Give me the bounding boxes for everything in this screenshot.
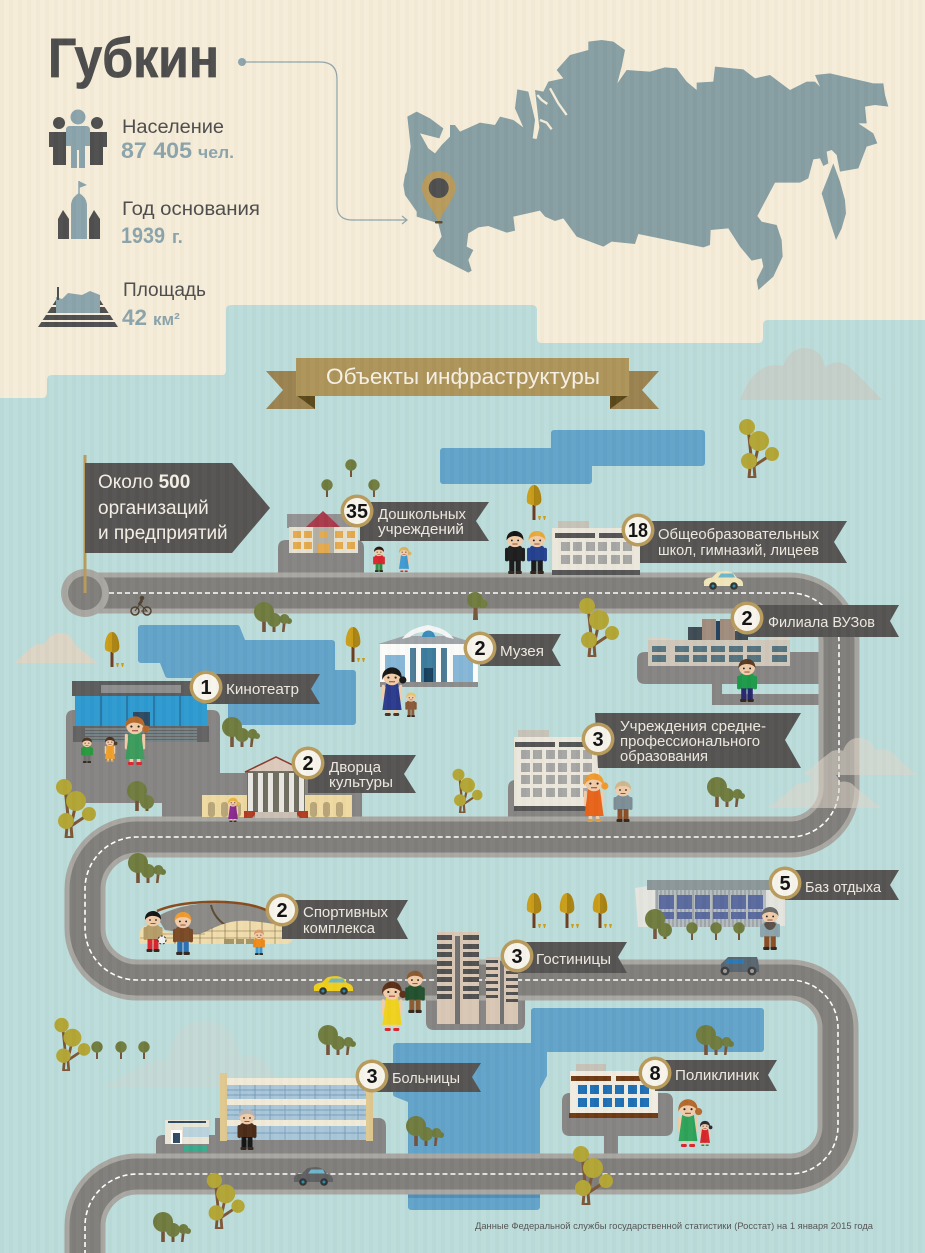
text: area: 42 [122,305,147,330]
flag text: и предприятий [98,523,228,544]
text: founding year: Год основания [122,199,260,220]
hospital building [165,1073,373,1152]
label: colleges: 3 [592,729,604,751]
label: hotels: 3 [511,946,523,968]
college building [514,730,599,811]
label: museums: 2 [474,638,486,660]
map of Russia [403,40,888,290]
cream car [704,571,743,590]
flag text: Около 500 [98,472,190,493]
school building [552,521,640,575]
people [81,531,780,1150]
label: schools: Общеобразовательных [658,526,819,543]
trees: small round [91,459,745,1059]
label: cinema: Кинотеатр [226,681,299,698]
cloud: upper right [740,348,882,400]
ribbon tails [266,371,315,409]
kindergarten building [287,511,358,553]
flag text: организаций [98,498,209,519]
bicycle [131,596,151,615]
pad: hospital [156,1118,386,1158]
label: recreation bases: Баз отдыха [805,879,882,896]
tree: green on road edge [467,592,488,620]
lake: top [443,433,702,481]
pad: hotel [426,975,525,1030]
trees: autumn [105,485,612,928]
label: schools [622,514,847,563]
label: preschools: Дошкольных [378,506,466,523]
text: founding year: 1939 [121,223,165,248]
cloud: over road at right [768,738,917,808]
label: sports complexes [266,894,408,939]
text: area [122,280,206,330]
lake: bottom [396,1011,761,1207]
label: hospitals [356,1060,481,1092]
road start circle [61,569,109,617]
central portico [245,757,307,772]
cinema building [72,681,209,742]
ground pads under buildings [66,540,822,1160]
label: preschools [340,494,489,541]
lake shadow under road [408,1193,540,1198]
title: Губкин [48,26,219,89]
label: palaces of culture: Дворца [329,759,382,776]
label: cinema: 1 [200,677,212,699]
text: founding year [121,199,260,248]
hotel towers [437,932,518,1024]
wings [202,795,248,817]
icon: population [49,110,107,168]
hospital main block [226,1078,369,1140]
sports complex [139,902,293,944]
label: preschools: учреждений [378,521,464,538]
university building [648,619,790,666]
trees: green clusters [127,602,745,1242]
text: population: Население [122,117,224,138]
pad: cinema and palace [66,710,362,820]
label: sports complexes: 2 [276,900,288,922]
van [720,957,759,976]
text: population: чел. [198,143,234,162]
section ribbon [266,358,659,409]
text: population [121,117,234,163]
cloud: faint behind hospital [104,1021,284,1087]
icon: founding year [58,181,100,239]
label: schools: 18 [628,520,648,542]
label: schools: школ, гимназий, лицеев [658,542,819,559]
label: recreation bases [768,866,899,900]
label: palaces of culture [292,746,416,793]
label: museums: Музея [500,643,544,660]
label: recreation bases: 5 [779,873,791,895]
yellow taxi [314,976,353,995]
museum building [378,625,478,687]
lakes [141,433,761,1207]
sky-blue ground area [0,305,925,1253]
icon: area [38,287,118,327]
recreation base building [635,880,785,927]
label: hospitals: Больницы [392,1070,460,1087]
label: hospitals: 3 [366,1066,378,1088]
label: palaces of culture: 2 [302,753,314,775]
dark car [294,1167,333,1186]
flag pole and flag [84,455,270,593]
label: museums [464,632,561,666]
label: colleges: Учреждения средне- [620,718,766,735]
label: preschools: 35 [346,501,368,523]
lake: middle [141,628,353,722]
label: cinema [190,670,320,704]
road [85,593,839,1253]
label: universities: 2 [741,608,753,630]
hospital annex [165,1120,209,1144]
label: sports complexes: Спортивных [303,904,388,921]
text: founding year: г. [172,227,183,247]
label: hotels [500,940,627,973]
map pin [422,171,455,224]
text: area: Площадь [123,280,206,301]
text: area: км² [153,310,180,329]
connector line from title to map [238,58,407,224]
label: hotels: Гостиницы [536,951,611,968]
label: colleges [582,713,801,768]
pad: kindergarten [278,540,364,575]
trees: branched [54,419,779,1229]
palace of culture [202,757,352,818]
ribbon heading: Объекты инфраструктуры [326,364,600,389]
pad: college [508,780,600,820]
label: colleges: профессионального [620,733,760,750]
label: polyclinics: Поликлиник [675,1067,759,1084]
label: sports complexes: комплекса [303,920,376,937]
label: palaces of culture: культуры [329,774,393,791]
pad: university [637,652,822,705]
ribbon body [296,358,629,396]
label: universities [730,602,899,637]
pad: polyclinic [562,1093,673,1160]
text: population: 87 405 [121,138,192,163]
cloud: left [15,633,97,663]
label: universities: Филиала ВУЗов [768,614,875,631]
polyclinic building [569,1064,658,1118]
label: polyclinics: 8 [649,1063,661,1085]
label: polyclinics [638,1056,777,1091]
label: colleges: образования [620,748,708,765]
source note: Данные Федеральной службы государственной статистики (Росстат) на 1 января 2015 года [475,1221,874,1232]
